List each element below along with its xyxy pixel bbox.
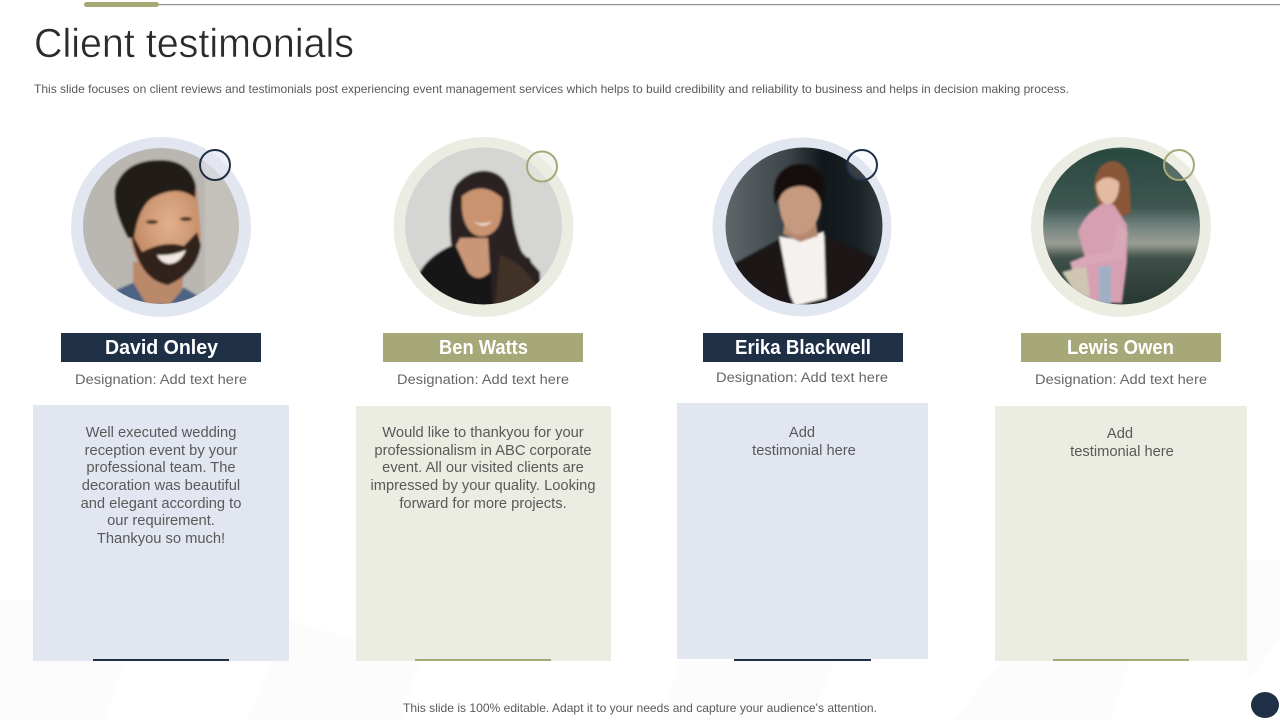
- icon: small ring: [1164, 150, 1194, 180]
- title: Client testimonials: [34, 20, 354, 66]
- subtitle: This slide focuses on client reviews and testimonials post experiencing event management services which helps to build credibility and reliability to business and helps in decision making process.: [34, 82, 1069, 96]
- testimonial card: impressed by your quality. Looking: [370, 478, 596, 494]
- designation: Designation: Add text here: [75, 372, 247, 387]
- testimonial card: event. All our visited clients are: [382, 460, 584, 476]
- testimonial card: Would like to thankyou for your: [382, 425, 584, 441]
- testimonial card: [995, 406, 1247, 661]
- panel: Erika Blackwell: [677, 138, 928, 661]
- name bar: Erika Blackwell: [735, 337, 871, 359]
- footer note: This slide is 100% editable. Adapt it to your needs and capture your audience's attention.: [403, 701, 877, 715]
- name bar: [703, 333, 903, 362]
- name bar: [61, 333, 261, 362]
- testimonial card: [33, 405, 289, 661]
- testimonial card: forward for more projects.: [399, 496, 567, 512]
- testimonial card: and elegant according to: [81, 496, 241, 512]
- testimonial card: professionalism in ABC corporate: [374, 443, 592, 459]
- testimonial card: testimonial here: [1070, 444, 1174, 460]
- testimonial card: our requirement.: [107, 513, 215, 529]
- testimonial card: [677, 403, 928, 661]
- designation: Designation: Add text here: [716, 370, 888, 385]
- portrait: Ben Watts: [394, 137, 574, 317]
- testimonial card: decoration was beautiful: [82, 478, 240, 494]
- testimonial card: Well executed wedding: [86, 425, 236, 441]
- testimonial card: professional team. The: [86, 460, 236, 476]
- icon: small ring: [847, 150, 877, 180]
- testimonial card: Thankyou so much!: [97, 531, 225, 547]
- name bar: David Onley: [105, 337, 219, 359]
- icon: corner circle: [1251, 692, 1279, 718]
- icon: small ring: [200, 150, 230, 180]
- name bar: Lewis Owen: [1067, 337, 1174, 359]
- testimonial card: Add: [1107, 426, 1133, 442]
- name bar: [383, 333, 583, 362]
- portrait: David Onley: [71, 137, 251, 317]
- testimonial card: [356, 406, 611, 661]
- name bar: Ben Watts: [439, 337, 528, 359]
- panel: Ben Watts: [356, 137, 611, 661]
- portrait: Lewis Owen: [1031, 137, 1211, 317]
- testimonial card: reception event by your: [85, 443, 237, 459]
- background pattern: [0, 560, 1280, 720]
- top accent line: [84, 2, 1280, 7]
- testimonial card: testimonial here: [752, 443, 856, 459]
- portrait: Erika Blackwell: [712, 138, 892, 316]
- icon: small ring: [527, 152, 557, 182]
- name bar: [1021, 333, 1221, 362]
- panel: David Onley: [33, 137, 289, 661]
- testimonial card: Add: [789, 425, 815, 441]
- designation: Designation: Add text here: [397, 372, 569, 387]
- designation: Designation: Add text here: [1035, 372, 1207, 387]
- panel: Lewis Owen: [995, 137, 1247, 661]
